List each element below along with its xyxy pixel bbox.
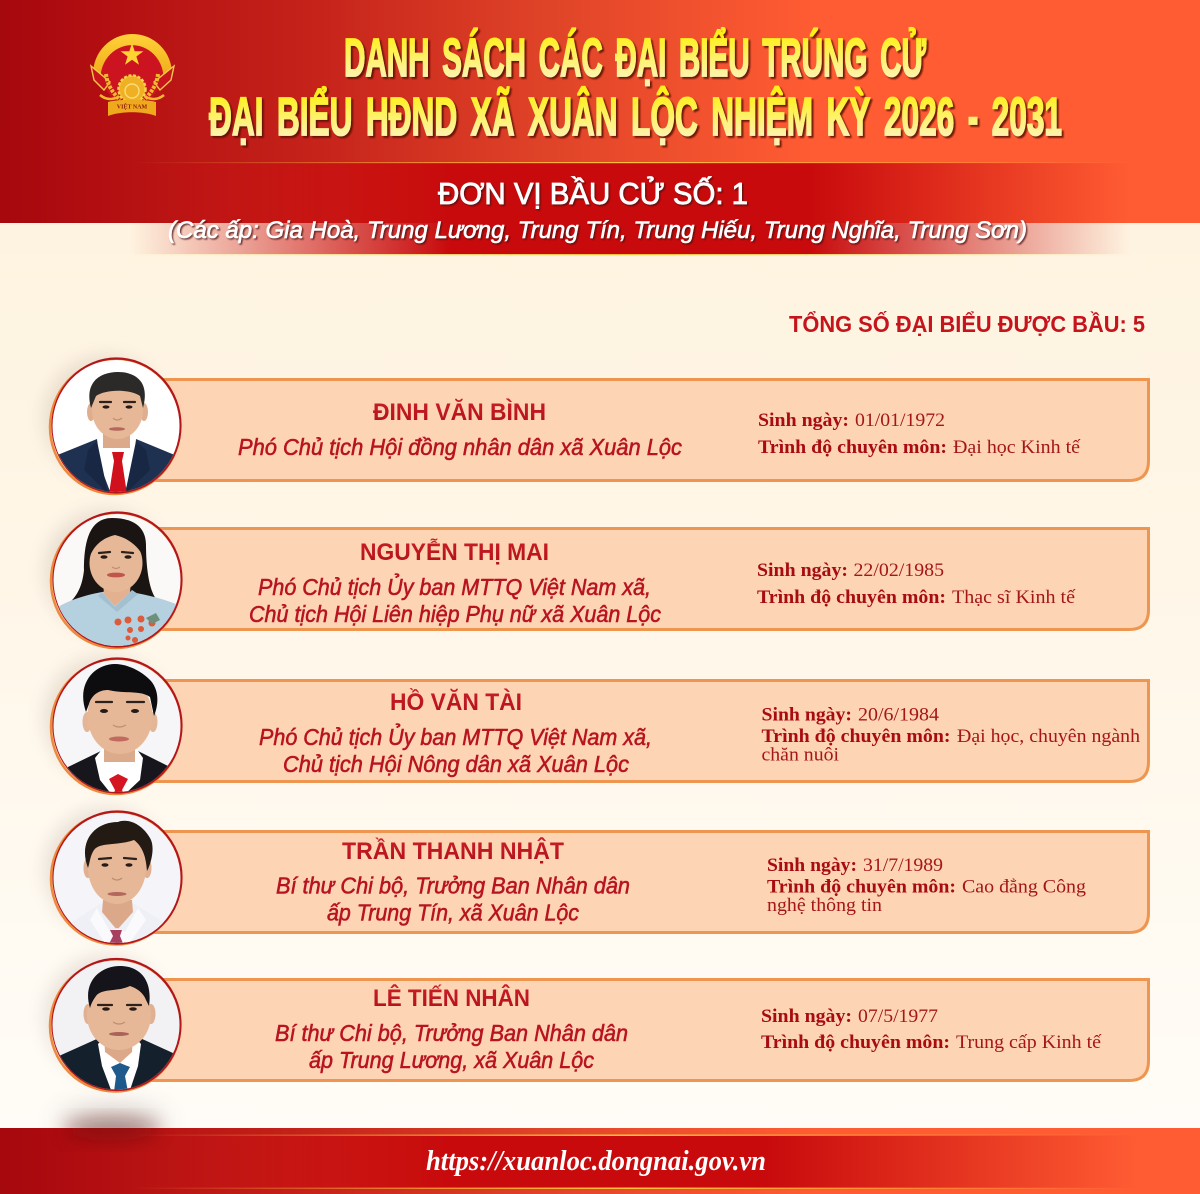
name: TRẦN THANH NHẬT bbox=[342, 837, 564, 865]
subtitle: electoral unit: ĐƠN VỊ BẦU CỬ SỐ: 1 bbox=[438, 175, 748, 211]
details: Sinh ngày: bbox=[762, 706, 852, 726]
total delegates count: TỔNG SỐ ĐẠI BIỂU ĐƯỢC BẦU: 5 bbox=[789, 310, 1145, 337]
name: LÊ TIẾN NHÂN bbox=[373, 984, 530, 1012]
panel: delegate 4 bbox=[44, 808, 1148, 950]
details bbox=[757, 561, 1076, 608]
subtitle: hamlets list: (Các ấp: Gia Hoà, Trung Lương, Trung Tín, Trung Hiếu, Trung Nghĩa, Trung Sơn) bbox=[168, 217, 1027, 244]
position: ấp Trung Tín, xã Xuân Lộc bbox=[327, 900, 579, 926]
portrait: Nguyễn Thị Mai bbox=[50, 512, 184, 650]
details: Trình độ chuyên môn: bbox=[762, 727, 950, 747]
name: ĐINH VĂN BÌNH bbox=[373, 398, 546, 426]
header banner bbox=[0, 0, 1200, 255]
portrait: Lê Tiến Nhân bbox=[50, 959, 184, 1095]
details: 07/5/1977 bbox=[858, 1007, 938, 1027]
details: Trình độ chuyên môn: bbox=[758, 438, 947, 458]
portrait: Trần Thanh Nhật bbox=[50, 812, 184, 950]
details: Đại học, chuyên ngành bbox=[957, 727, 1140, 747]
details: Cao đẳng Công bbox=[962, 878, 1086, 898]
details: Đại học Kinh tế bbox=[953, 438, 1081, 458]
position: Phó Chủ tịch Ủy ban MTTQ Việt Nam xã, bbox=[259, 722, 652, 750]
details: Trình độ chuyên môn: bbox=[767, 878, 956, 898]
panel: delegate 3 bbox=[44, 656, 1148, 800]
name: NGUYỄN THỊ MAI bbox=[360, 537, 549, 566]
details: Sinh ngày: bbox=[767, 856, 857, 876]
position: Bí thư Chi bộ, Trưởng Ban Nhân dân bbox=[276, 872, 630, 898]
details: Trình độ chuyên môn: bbox=[761, 1033, 950, 1053]
details bbox=[762, 706, 1140, 766]
position bbox=[249, 572, 661, 627]
panel: delegate 1 bbox=[44, 356, 1148, 500]
name: HỒ VĂN TÀI bbox=[390, 688, 522, 716]
details: 01/01/1972 bbox=[855, 411, 945, 431]
portrait: Hồ Văn Tài bbox=[50, 658, 184, 800]
details: 20/6/1984 bbox=[858, 706, 939, 726]
panel: delegate 2 bbox=[44, 510, 1148, 650]
position: Phó Chủ tịch Hội đồng nhân dân xã Xuân Lộc bbox=[238, 434, 682, 460]
details bbox=[761, 1007, 1102, 1053]
details: Sinh ngày: bbox=[757, 561, 848, 581]
details: Trung cấp Kinh tế bbox=[956, 1033, 1102, 1053]
website URL: https://xuanloc.dongnai.gov.vn bbox=[426, 1145, 766, 1177]
title bbox=[209, 28, 1062, 147]
footer shadow and banner bbox=[0, 1110, 1200, 1194]
details: Sinh ngày: bbox=[758, 411, 849, 431]
details bbox=[767, 856, 1086, 916]
details: Sinh ngày: bbox=[761, 1007, 852, 1027]
position bbox=[259, 722, 652, 777]
details: 22/02/1985 bbox=[854, 561, 944, 581]
position: Chủ tịch Hội Liên hiệp Phụ nữ xã Xuân Lộc bbox=[249, 601, 661, 627]
position: ấp Trung Lương, xã Xuân Lộc bbox=[309, 1047, 594, 1073]
position: Phó Chủ tịch Ủy ban MTTQ Việt Nam xã, bbox=[258, 572, 651, 600]
icon: national emblem of Vietnam: VIỆT NAM bbox=[117, 102, 148, 110]
details: chăn nuôi bbox=[762, 746, 839, 766]
details: 31/7/1989 bbox=[863, 856, 943, 876]
position bbox=[275, 1020, 628, 1073]
details: Trình độ chuyên môn: bbox=[757, 588, 946, 608]
details: Thạc sĩ Kinh tế bbox=[952, 588, 1076, 608]
position: Chủ tịch Hội Nông dân xã Xuân Lộc bbox=[283, 751, 629, 777]
portrait: Đinh Văn Bình bbox=[50, 358, 182, 500]
details bbox=[758, 411, 1081, 458]
details: nghệ thông tin bbox=[767, 896, 882, 916]
panel: delegate 5 bbox=[44, 955, 1148, 1095]
position bbox=[276, 872, 630, 926]
position: Bí thư Chi bộ, Trưởng Ban Nhân dân bbox=[275, 1020, 628, 1046]
icon: national emblem of Vietnam bbox=[91, 34, 174, 116]
